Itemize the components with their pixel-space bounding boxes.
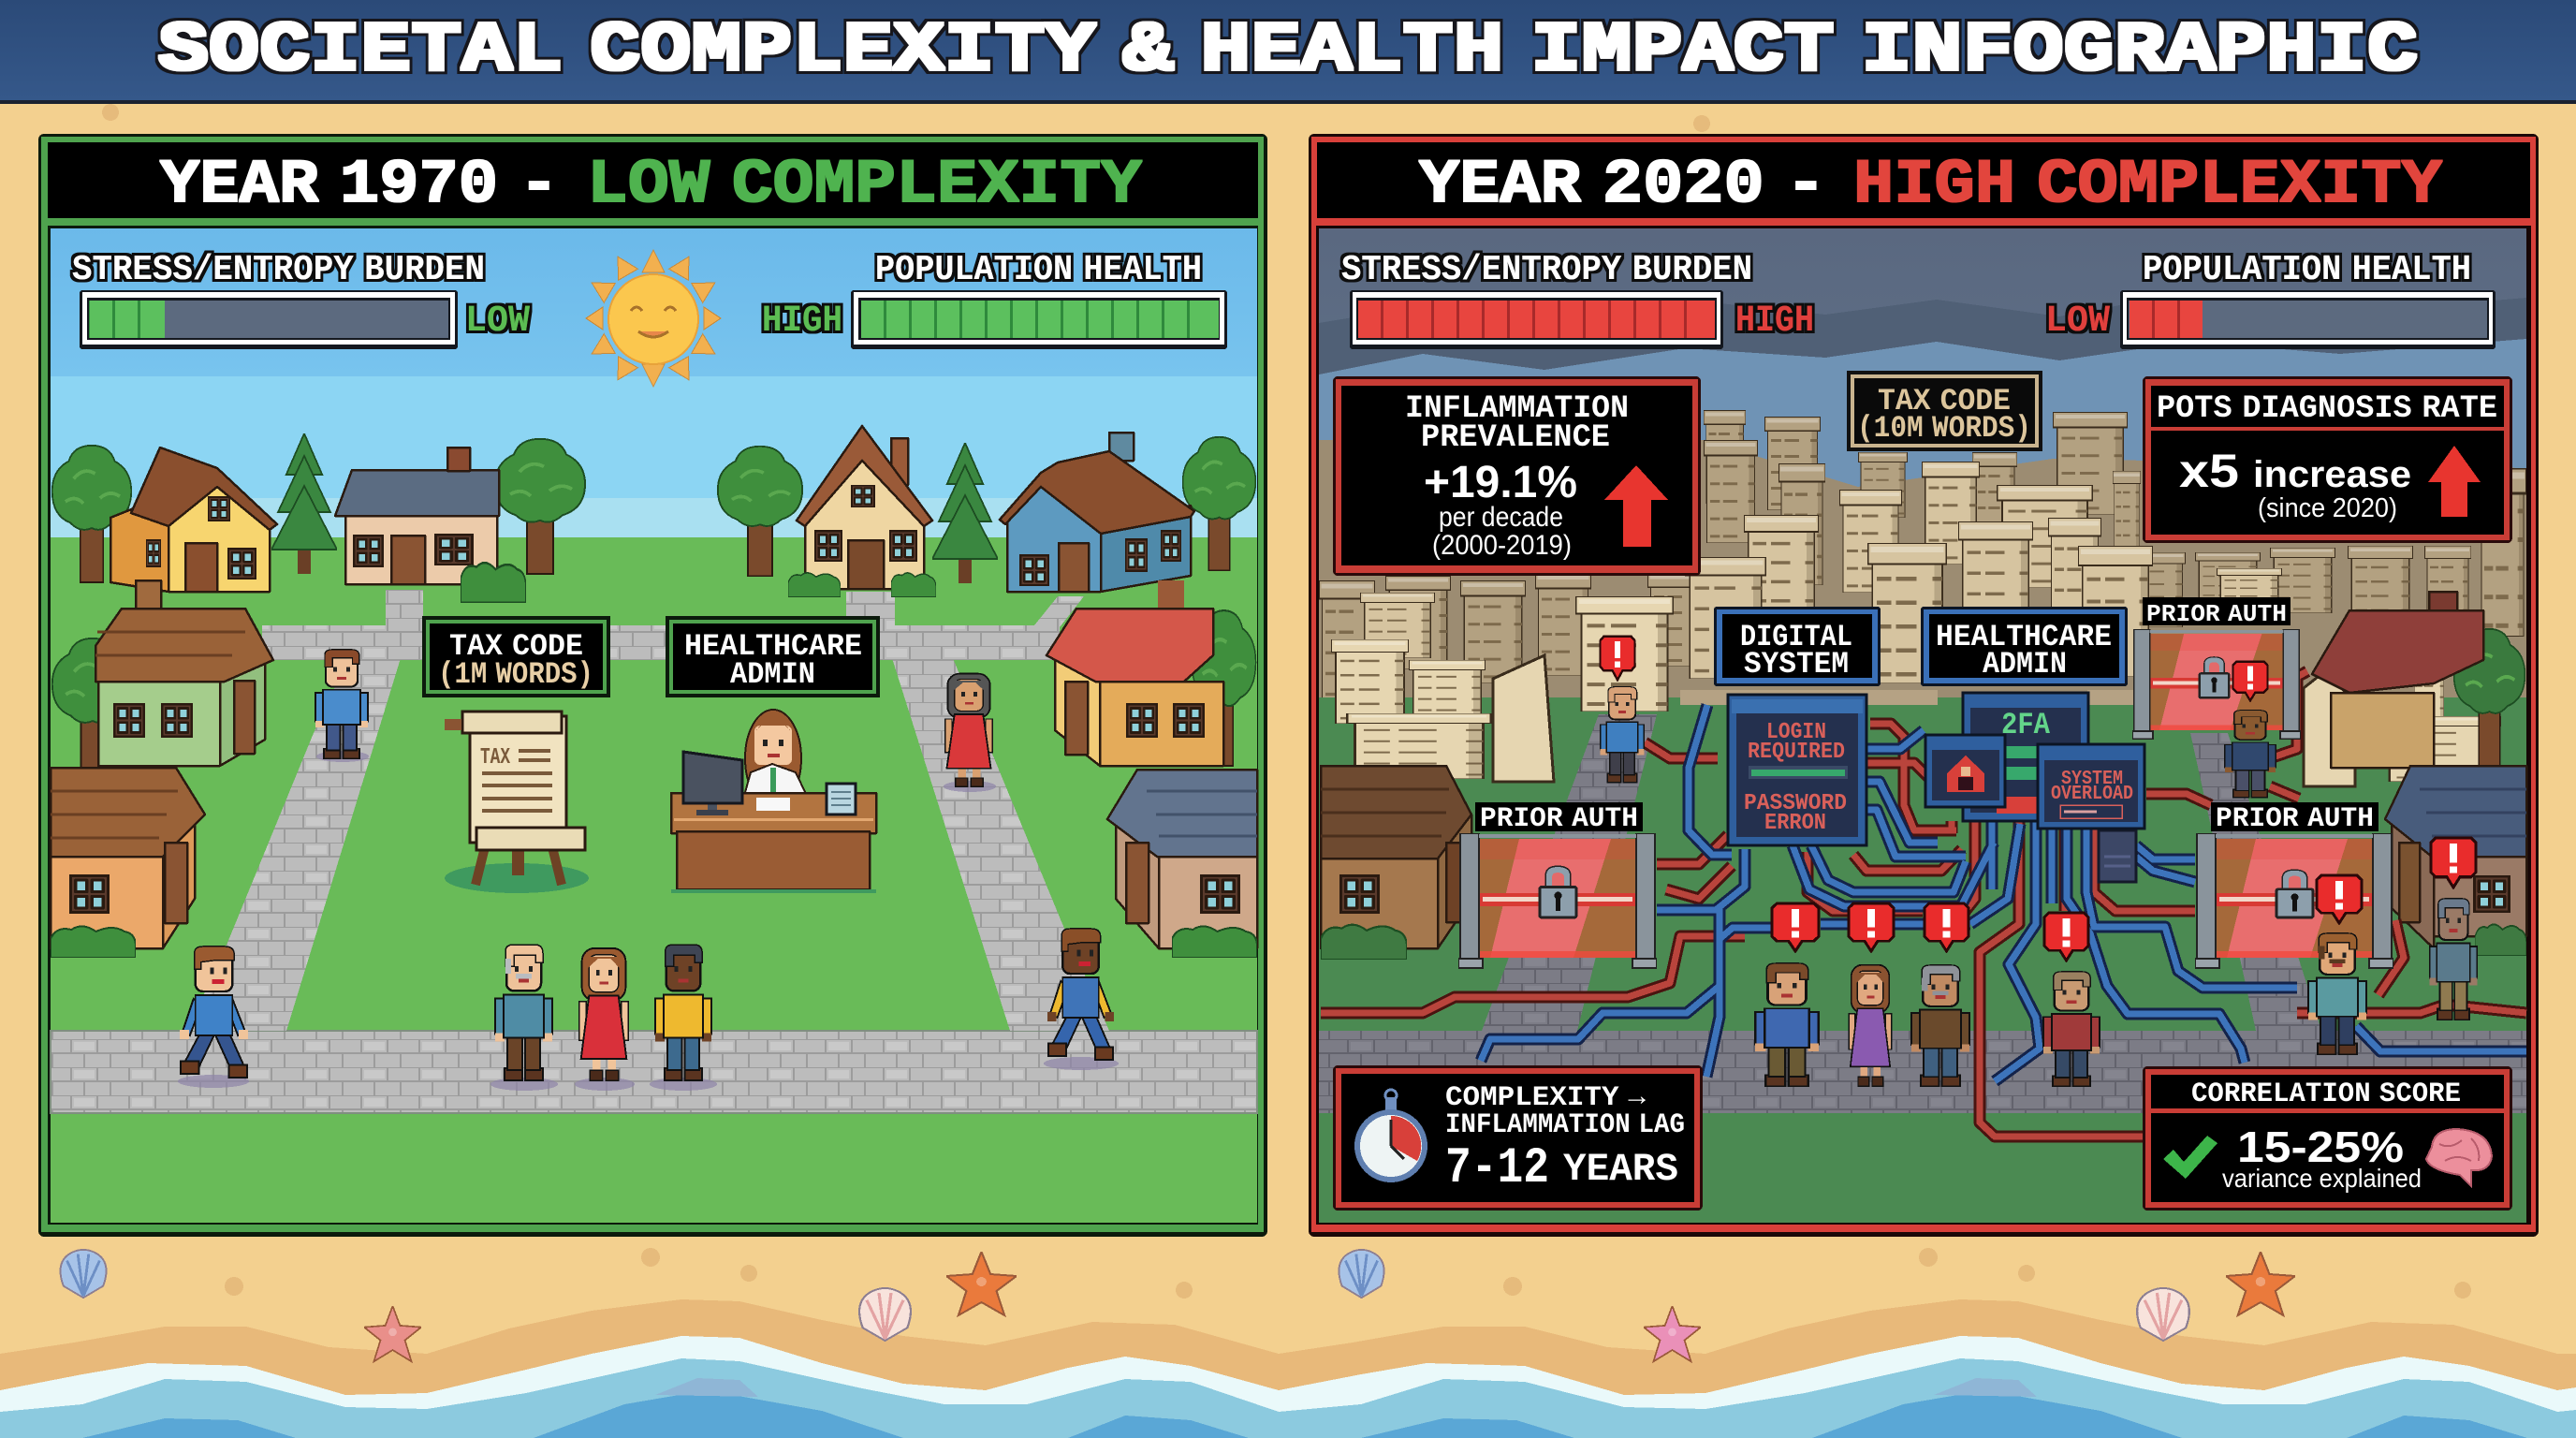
shell: blue right: [1339, 1250, 1384, 1298]
stat box: POTS diagnosis rate: x5: [2179, 445, 2239, 497]
stat box: POTS diagnosis rate: POTS DIAGNOSIS RATE: [2157, 391, 2497, 427]
dark red house top right: [2312, 592, 2525, 768]
stat box: complexity inflammation lag: INFLAMMATION LAG: [1445, 1109, 1685, 1141]
panel heading 1970: YEAR 1970 -: [160, 150, 559, 220]
icon: red up arrow: [1604, 465, 1668, 547]
icon: brain: [2426, 1129, 2492, 1186]
icon: padlock right: [2276, 871, 2313, 917]
label: tax code 1M words: (1M WORDS): [438, 657, 593, 692]
person: old man: [490, 945, 558, 1091]
stat box: correlation score: variance explained: [2222, 1164, 2422, 1193]
stat box: correlation score: 15-25%: [2237, 1123, 2404, 1171]
population health meter: HIGH: [762, 301, 842, 343]
dark house: right: [2385, 766, 2526, 948]
screen: security alert: [1925, 735, 2005, 807]
house: yellow: [110, 448, 277, 592]
stat box: POTS diagnosis rate: (since 2020): [2258, 493, 2397, 523]
population health meter: [762, 250, 1227, 349]
desk: [671, 793, 876, 893]
stat box: complexity inflammation lag: COMPLEXITY →: [1445, 1082, 1646, 1114]
villagers walking: [178, 650, 1119, 1091]
label: tax code 10M words: [1847, 371, 2042, 451]
stress burden meter: [72, 250, 530, 349]
screen: login error: LOGIN: [1766, 720, 1826, 745]
label: healthcare admin: ADMIN: [730, 657, 815, 692]
person: stressed woman purple: [1849, 903, 1894, 1086]
title: SOCIETAL COMPLEXITY & HEALTH IMPACT INFOGRAPHIC: [158, 12, 2418, 91]
trees and pines back row: [52, 433, 1255, 583]
prior auth gate: right: [2195, 802, 2393, 968]
screen: login error: ERRON: [1764, 811, 1826, 836]
person: stressed man red shirt: [2043, 913, 2100, 1086]
dark bush: [1321, 925, 1407, 960]
dark server box: [2099, 830, 2136, 882]
label: tax code 10M words: TAX CODE: [1878, 384, 2011, 418]
bush: [461, 563, 526, 603]
stat box: POTS diagnosis rate: increase: [2253, 454, 2411, 495]
panel frame: red: [1309, 134, 2539, 1237]
panel heading 1970: [160, 150, 1142, 220]
prior auth gate: top: [2132, 597, 2301, 739]
bush right: [1172, 926, 1257, 958]
house: blue: [1000, 433, 1194, 592]
cobblestone paths: [51, 590, 1257, 1113]
label: digital system: SYSTEM: [1744, 647, 1849, 682]
icon: tax scroll on easel: TAX: [480, 745, 510, 770]
panel: year 2020 high complexity: [1309, 134, 2539, 1237]
stressed people: [1601, 637, 2477, 1086]
person: woman in red: [575, 948, 635, 1091]
panel frame: green: [38, 134, 1267, 1237]
person: man in yellow: [650, 945, 717, 1091]
paper skyline back layer: [1319, 410, 2526, 730]
grass: [51, 537, 1257, 1223]
computer monitor: [683, 752, 742, 815]
icon: green check: [2163, 1136, 2217, 1179]
stat box: complexity inflammation lag: YEARS: [1563, 1147, 1678, 1192]
stat box: inflammation prevalence: (2000-2019): [1432, 530, 1572, 561]
label: healthcare admin: [1921, 607, 2128, 686]
person: back-facing woman at gate: [2225, 662, 2276, 798]
panel heading 1970: LOW COMPLEXITY: [587, 150, 1142, 220]
label: tax code 1M words: TAX CODE: [449, 629, 583, 664]
person: stressed man blue shirt: [1755, 903, 1819, 1086]
panel heading 2020: [1419, 150, 2442, 220]
stress burden meter: STRESS/ENTROPY BURDEN: [72, 250, 485, 290]
dark bush right: [2475, 924, 2526, 956]
label: healthcare admin: HEALTHCARE: [684, 629, 862, 664]
label: prior auth left: PRIOR AUTH: [1480, 803, 1638, 835]
stormy sky: [1319, 228, 2526, 524]
label: digital system: [1714, 607, 1881, 686]
stat box: complexity inflammation lag: 7-12: [1445, 1140, 1549, 1197]
population health meter: LOW: [2045, 301, 2110, 343]
sand speckles: [102, 104, 2471, 1299]
screen: system overload: SYSTEM: [2061, 769, 2123, 790]
stress burden meter: [1341, 250, 1814, 349]
panel heading 2020: YEAR 2020 -: [1419, 150, 1826, 220]
starfish: pink right: [1644, 1306, 1701, 1361]
stat box: correlation score: [2143, 1066, 2512, 1211]
population health meter: [2045, 250, 2496, 349]
paper skyline mid layer: [1360, 462, 2282, 683]
population health meter: POPULATION HEALTH: [2143, 250, 2471, 290]
label: prior auth top: PRIOR AUTH: [2146, 600, 2287, 628]
stat box: complexity inflammation lag: [1333, 1065, 1703, 1211]
screen: login error: [1728, 695, 1866, 845]
person: stressed old man: [1911, 903, 1969, 1086]
person: walking man left: [178, 946, 249, 1088]
icon: tax scroll on easel: [445, 712, 589, 893]
doctor at desk: [671, 710, 876, 893]
person: angry man teal shirt: [2308, 875, 2366, 1054]
label: healthcare admin: HEALTHCARE: [1936, 620, 2112, 654]
dark grass: [1319, 690, 2526, 1223]
screen: 2FA: [1963, 693, 2088, 821]
shell: blue left: [61, 1250, 106, 1298]
person: bald man with alert: [1601, 637, 1644, 783]
house: cream: [797, 426, 932, 589]
person: man on top path: [315, 650, 369, 762]
screen: login error: PASSWORD: [1744, 791, 1847, 816]
paper scrolls front right: [2304, 658, 2501, 786]
shell: pink left: [859, 1288, 911, 1341]
clipboard: [827, 784, 856, 814]
icon: padlock top: [2200, 657, 2229, 697]
label: healthcare admin: ADMIN: [1983, 647, 2067, 682]
stress burden meter: HIGH: [1735, 301, 1814, 343]
stress burden meter: LOW: [465, 301, 530, 343]
bushes at cream house: [788, 573, 936, 597]
bush left: [51, 926, 136, 958]
house: orange: [51, 768, 205, 948]
screen: system overload: OVERLOAD: [2051, 784, 2133, 805]
doctor: [744, 710, 807, 807]
icon: smiling sun: [586, 250, 721, 387]
stress burden meter: STRESS/ENTROPY BURDEN: [1341, 250, 1752, 290]
label: tax code 1M words: [422, 616, 610, 697]
label: tax code 10M words: (10M WORDS): [1857, 411, 2031, 446]
stat box: inflammation prevalence: [1333, 376, 1701, 576]
sky: [51, 228, 1257, 537]
person: man in overalls: [1044, 929, 1119, 1070]
stat box: inflammation prevalence: INFLAMMATION: [1405, 391, 1629, 427]
starfish: pink left: [364, 1306, 421, 1361]
panel: year 1970 low complexity: [38, 134, 1267, 1237]
label: digital system: DIGITAL: [1740, 620, 1852, 654]
tangled blue wires: [1481, 705, 2526, 1081]
panel heading 2020: HIGH COMPLEXITY: [1853, 150, 2442, 220]
beach waves: [0, 1299, 2576, 1438]
screen: login error: REQUIRED: [1748, 740, 1845, 765]
person: hooded person: [2430, 838, 2477, 1020]
starfish: orange right: [2226, 1252, 2295, 1315]
stat box: inflammation prevalence: +19.1%: [1424, 458, 1577, 507]
population health meter: POPULATION HEALTH: [875, 250, 1202, 290]
house: grey roof: [335, 448, 499, 584]
prior auth gate: left: [1458, 802, 1657, 968]
stat box: POTS diagnosis rate: [2143, 376, 2512, 543]
stat box: inflammation prevalence: per decade: [1439, 502, 1563, 533]
house: red roof: [1046, 580, 1256, 766]
tangled red wires: [1321, 671, 2526, 1137]
dark cobblestone paths: [1319, 714, 2526, 1113]
dark house: left: [1321, 766, 1471, 948]
paper scrolls front left: [1331, 596, 1674, 782]
screen: system overload: [2038, 744, 2144, 829]
label: prior auth right: PRIOR AUTH: [2216, 803, 2374, 835]
icon: red up arrow: [2428, 446, 2481, 517]
shell: pink right: [2137, 1288, 2189, 1341]
house: green: [52, 580, 273, 775]
icon: padlock left: [1540, 867, 1576, 917]
stat box: inflammation prevalence: PREVALENCE: [1421, 420, 1610, 456]
icon: stopwatch: [1357, 1090, 1425, 1180]
label: healthcare admin: [666, 616, 880, 697]
stat box: correlation score: CORRELATION SCORE: [2191, 1078, 2461, 1110]
screen: 2FA: 2FA: [2001, 708, 2051, 742]
house: blue roof: [1107, 770, 1257, 948]
starfish: orange left: [946, 1252, 1017, 1315]
person: woman on right path: [944, 674, 996, 792]
header bar: [0, 0, 2576, 104]
